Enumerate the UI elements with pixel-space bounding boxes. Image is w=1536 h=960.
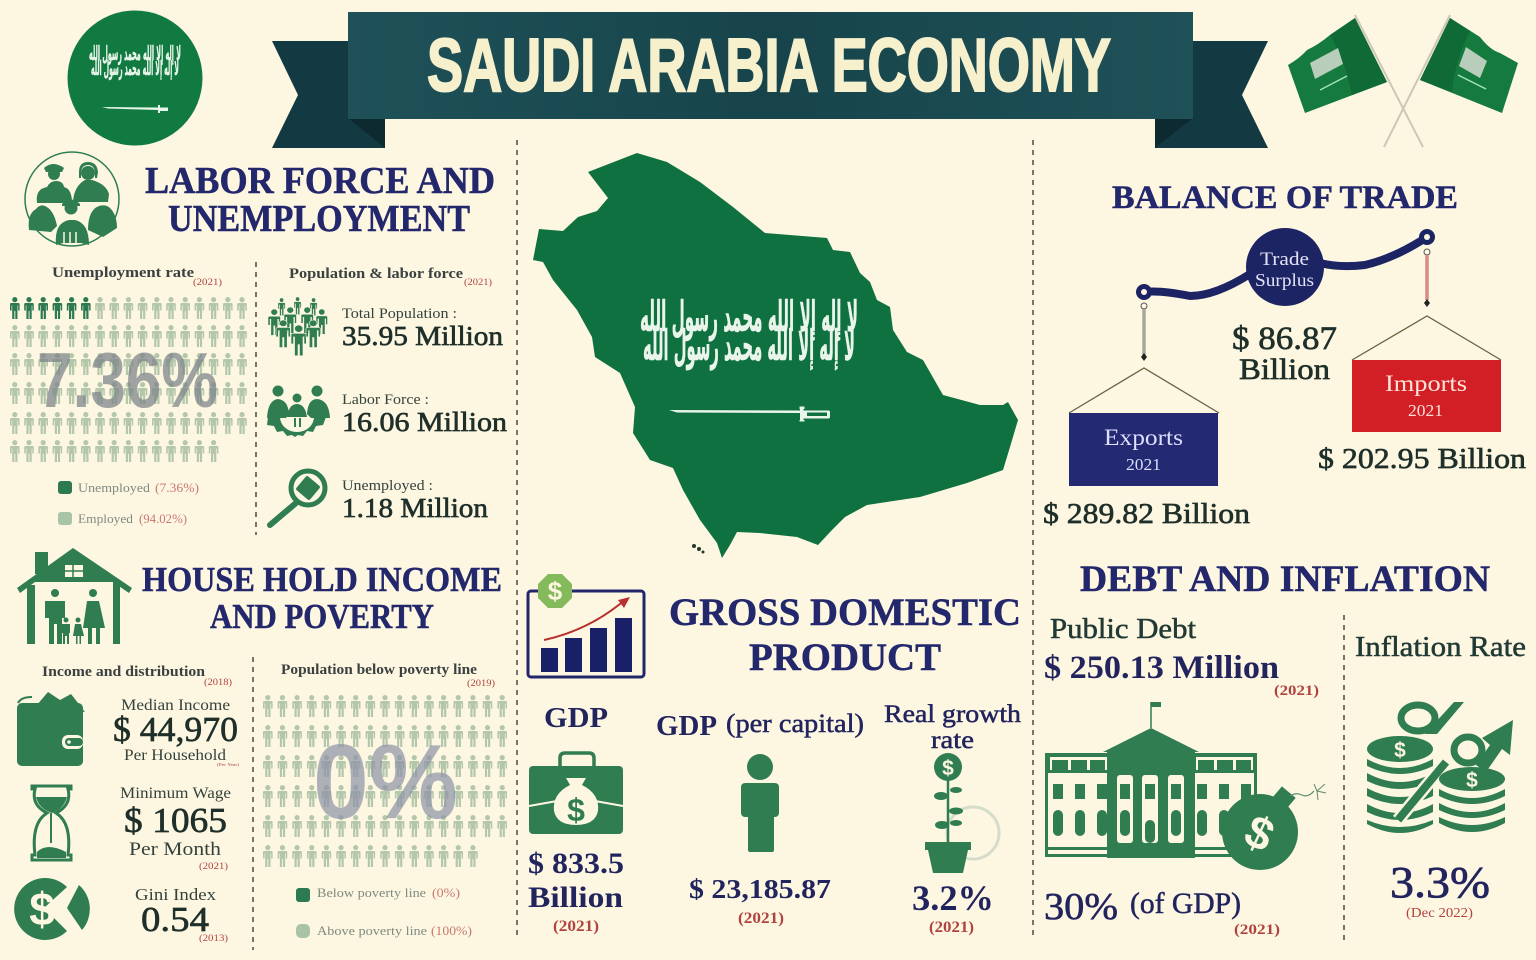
trade surplus circle: Trade bbox=[1260, 249, 1309, 270]
icon: labor gear bbox=[267, 386, 330, 437]
minimum wage: Minimum Wage bbox=[120, 785, 231, 802]
minimum wage: Per Month bbox=[129, 839, 222, 860]
labor force stat bbox=[342, 392, 508, 437]
poverty title bbox=[281, 662, 495, 689]
icon: house and family bbox=[17, 548, 132, 644]
debt percent of GDP: (2021) bbox=[1234, 922, 1280, 938]
legend: unemployment: Unemployed bbox=[78, 480, 151, 495]
icon: gini bbox=[14, 878, 90, 940]
GDP value: (2021) bbox=[553, 918, 599, 935]
minimum wage bbox=[120, 785, 231, 872]
legend: unemployment: Employed bbox=[78, 511, 134, 526]
panel: balance of trade bbox=[1043, 180, 1527, 530]
heading: GROSS DOMESTIC bbox=[669, 591, 1021, 634]
heading bbox=[145, 160, 495, 240]
poverty title: (2019) bbox=[467, 678, 495, 689]
GDP value bbox=[528, 847, 624, 935]
map of Saudi Arabia bbox=[533, 153, 1018, 558]
icon: coins and percent bbox=[1367, 702, 1513, 833]
population stat bbox=[342, 306, 504, 351]
heading: BALANCE OF TRADE bbox=[1112, 180, 1458, 216]
GDP per capita value: $ 23,185.87 bbox=[689, 874, 831, 904]
debt percent of GDP: (of GDP) bbox=[1130, 887, 1241, 920]
heading: AND POVERTY bbox=[210, 597, 434, 636]
heading: LABOR FORCE AND bbox=[145, 160, 495, 202]
debt percent of GDP bbox=[1044, 886, 1280, 938]
population stat: Total Population : bbox=[342, 306, 457, 322]
population and labor force title: (2021) bbox=[464, 277, 492, 288]
real growth rate label bbox=[884, 701, 1022, 754]
labor force stat: Labor Force : bbox=[342, 392, 429, 408]
icon: government building and bomb: $ bbox=[1237, 804, 1282, 862]
text: لا إله إلا الله محمد رسول الله bbox=[91, 56, 179, 80]
icon: briefcase bbox=[529, 753, 623, 834]
icon: growth chart bbox=[528, 574, 644, 677]
icon: plant: $ bbox=[942, 757, 954, 780]
text: لا إله إلا الله محمد رسول الله bbox=[89, 41, 181, 65]
population and labor force title bbox=[289, 266, 492, 288]
GDP value: $ 833.5 bbox=[528, 847, 624, 880]
inflation label: Inflation Rate bbox=[1355, 632, 1526, 663]
icon: wallet bbox=[17, 692, 85, 766]
growth value bbox=[912, 878, 994, 936]
real growth rate label: rate bbox=[931, 727, 974, 754]
heading bbox=[142, 560, 502, 636]
median income: Per Household bbox=[124, 747, 226, 764]
GDP per capita value: (2021) bbox=[738, 910, 784, 927]
legend: poverty: Above poverty line bbox=[317, 923, 427, 938]
panel: household income and poverty bbox=[14, 548, 507, 944]
growth value: (2021) bbox=[929, 919, 974, 936]
icon: gini: $ bbox=[29, 883, 55, 935]
income title: (2018) bbox=[204, 677, 232, 688]
unemployment rate title bbox=[52, 265, 222, 288]
legend: poverty: (0%) bbox=[432, 885, 460, 900]
median income: Median Income bbox=[121, 697, 230, 714]
map of Saudi Arabia: لا إله إلا الله محمد رسول الله bbox=[643, 321, 855, 371]
legend: unemployment: (7.36%) bbox=[155, 480, 199, 495]
icon: crowd bbox=[268, 297, 328, 356]
dividers bbox=[253, 140, 1344, 950]
panel: gross domestic product bbox=[528, 574, 1022, 936]
median income: $ 44,970 bbox=[113, 710, 238, 749]
heading: DEBT AND INFLATION bbox=[1080, 559, 1490, 600]
legend: poverty: Below poverty line bbox=[317, 885, 426, 900]
title banner bbox=[272, 12, 1268, 148]
heading bbox=[669, 591, 1021, 679]
icon: crossed flags bbox=[1288, 15, 1518, 147]
container: imports bbox=[1352, 249, 1501, 432]
container: exports: 2021 bbox=[1126, 455, 1161, 474]
container: imports: Imports bbox=[1385, 371, 1467, 396]
GDP per capita label: (per capital) bbox=[726, 709, 864, 738]
legend: unemployment: (94.02%) bbox=[139, 511, 187, 526]
icon: magnifier bbox=[270, 471, 325, 525]
unemployed stat: Unemployed : bbox=[342, 478, 433, 494]
minimum wage: $ 1065 bbox=[124, 801, 227, 840]
median income bbox=[113, 697, 240, 767]
heading: HOUSE HOLD INCOME bbox=[142, 560, 502, 599]
minimum wage: (2021) bbox=[199, 861, 228, 872]
icon: coins and percent: $ bbox=[1394, 739, 1406, 762]
icon: plant bbox=[925, 753, 999, 873]
icon: coins and percent: $ bbox=[1466, 769, 1478, 792]
legend: poverty bbox=[296, 885, 472, 938]
population and labor force title: Population & labor force bbox=[289, 266, 463, 282]
population stat: 35.95 Million bbox=[342, 321, 504, 351]
GDP per capita label bbox=[656, 709, 864, 742]
labor force stat: 16.06 Million bbox=[342, 407, 508, 437]
exports value: $ 289.82 Billion bbox=[1043, 498, 1251, 530]
debt percent of GDP: 30% bbox=[1044, 886, 1118, 928]
icon: person bbox=[741, 754, 779, 852]
GDP per capita label: GDP bbox=[656, 710, 717, 742]
value: 0%: 0% bbox=[313, 723, 458, 841]
surplus value: Billion bbox=[1239, 353, 1330, 386]
GDP per capita value bbox=[689, 874, 831, 927]
inflation value: (Dec 2022) bbox=[1406, 905, 1473, 920]
icon: government building and bomb bbox=[1045, 702, 1326, 870]
imports value: $ 202.95 Billion bbox=[1318, 443, 1527, 475]
unemployed stat: 1.18 Million bbox=[342, 493, 489, 523]
heading: UNEMPLOYMENT bbox=[168, 198, 470, 240]
pictogram: poverty bbox=[263, 695, 507, 867]
panel: debt and inflation bbox=[1044, 559, 1526, 938]
trade surplus circle bbox=[1246, 228, 1324, 306]
icon: hourglass bbox=[32, 786, 71, 860]
unemployment rate title: (2021) bbox=[193, 277, 222, 288]
inflation value: 3.3% bbox=[1390, 858, 1490, 907]
icon: workers bbox=[25, 152, 119, 246]
icon: growth chart: $ bbox=[548, 576, 563, 606]
income title bbox=[42, 664, 232, 688]
pictogram: unemployment bbox=[10, 297, 247, 462]
public debt: Public Debt bbox=[1050, 614, 1196, 645]
icon: round flag bbox=[68, 10, 202, 146]
gini index: Gini Index bbox=[135, 885, 217, 904]
container: imports: 2021 bbox=[1408, 401, 1443, 420]
panel: labor force and unemployment bbox=[10, 152, 508, 526]
income title: Income and distribution bbox=[42, 664, 205, 680]
trade surplus circle: Surplus bbox=[1255, 270, 1314, 290]
growth value: 3.2% bbox=[912, 878, 994, 918]
GDP label: GDP bbox=[544, 702, 608, 734]
container: exports bbox=[1069, 303, 1219, 486]
median income: (Per Year) bbox=[217, 762, 240, 767]
unemployment rate title: Unemployment rate bbox=[52, 265, 194, 281]
container: exports: Exports bbox=[1104, 425, 1183, 450]
heading: PRODUCT bbox=[749, 636, 941, 679]
unemployed stat bbox=[342, 478, 489, 523]
legend: unemployment bbox=[58, 480, 199, 526]
balance beam bbox=[1136, 229, 1435, 300]
surplus value bbox=[1232, 321, 1337, 386]
icon: briefcase: $ bbox=[567, 792, 585, 828]
title: SAUDI ARABIA ECONOMY bbox=[427, 23, 1111, 107]
real growth rate label: Real growth bbox=[884, 701, 1022, 728]
legend: poverty: (100%) bbox=[431, 923, 472, 938]
public debt bbox=[1044, 614, 1319, 699]
poverty title: Population below poverty line bbox=[281, 662, 478, 678]
GDP value: Billion bbox=[528, 881, 623, 914]
public debt: $ 250.13 Million bbox=[1044, 650, 1279, 686]
gini index bbox=[135, 885, 228, 944]
gini index: 0.54 bbox=[141, 900, 209, 939]
surplus value: $ 86.87 bbox=[1232, 321, 1337, 357]
value: 7.36%: 7.36% bbox=[37, 336, 218, 424]
public debt: (2021) bbox=[1274, 683, 1319, 699]
map of Saudi Arabia: لا إله إلا الله محمد رسول الله bbox=[640, 292, 858, 342]
gini index: (2013) bbox=[199, 933, 228, 944]
